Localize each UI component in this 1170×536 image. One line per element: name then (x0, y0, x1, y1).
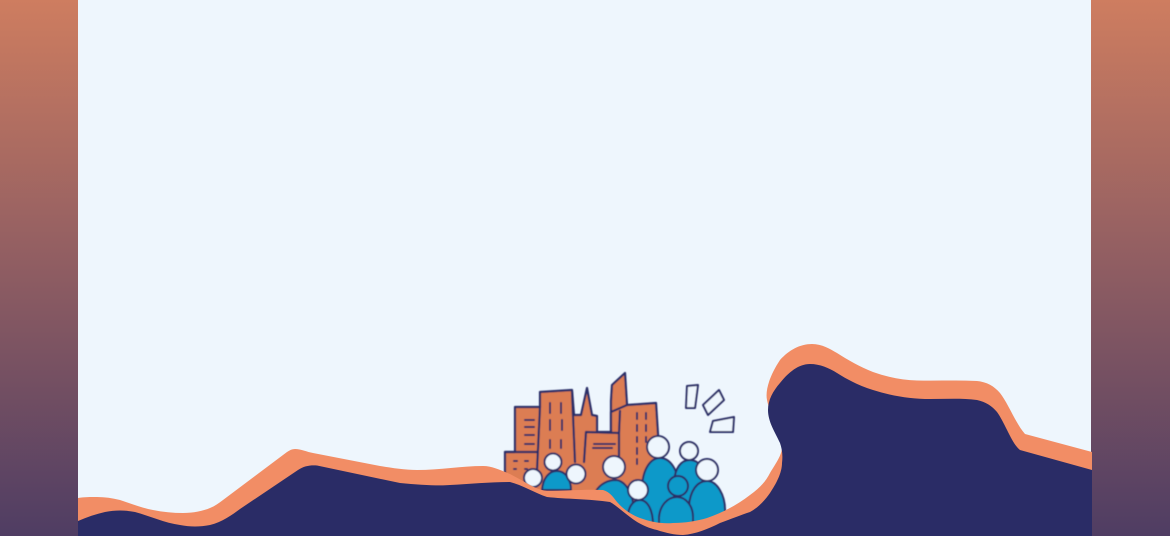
navy hill (78, 364, 1092, 536)
city and crowd illustration (505, 373, 734, 530)
right gradient side bar (1091, 0, 1170, 536)
city skyline (505, 373, 659, 505)
crowd of people (524, 436, 725, 530)
loose papers (686, 385, 734, 432)
orange wave (78, 344, 1092, 536)
left gradient side bar (0, 0, 78, 536)
